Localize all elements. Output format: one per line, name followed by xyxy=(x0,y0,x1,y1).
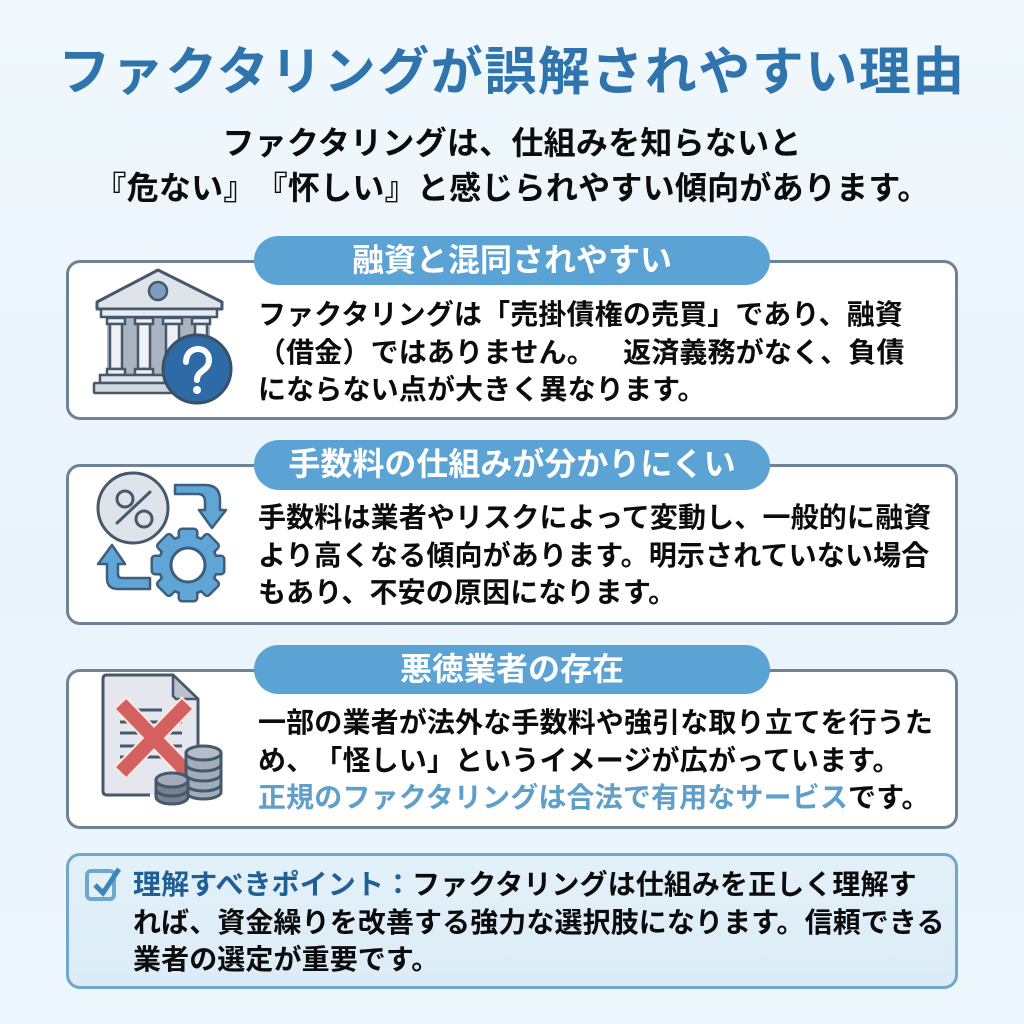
heading pill: 手数料の仕組みが分かりにくい xyxy=(288,446,736,482)
body text xyxy=(258,502,931,608)
body text: より高くなる傾向があります。明示されていない場合 xyxy=(258,540,929,570)
card frame xyxy=(66,260,958,420)
panel: fee structure xyxy=(66,440,958,625)
card frame xyxy=(66,669,958,829)
panel: loan confusion xyxy=(66,236,958,420)
body text: ファクタリングは「売掛債権の売買」であり、融資 xyxy=(258,299,903,330)
callout frame xyxy=(66,853,958,989)
body text: （借金）ではありません。 返済義務がなく、負債 xyxy=(258,336,905,368)
subtitle xyxy=(94,125,930,206)
body text xyxy=(258,299,905,405)
panel: bad actors xyxy=(66,645,958,829)
subtitle: ファクタリングは、仕組みを知らないと xyxy=(222,125,802,161)
callout text: れば、資金繰りを改善する強力な選択肢になります。信頼できる xyxy=(133,906,945,938)
title: ファクタリングが誤解されやすい理由 xyxy=(58,44,966,102)
body text: 一部の業者が法外な手数料や強引な取り立てを行うた xyxy=(258,707,933,738)
body text: め、「怪しい」というイメージが広がっています。 xyxy=(258,744,901,776)
callout: key point xyxy=(66,853,958,989)
icon: checkbox xyxy=(85,868,121,901)
body text: にならない点が大きく異なります。 xyxy=(258,374,706,405)
heading pill xyxy=(254,236,770,285)
body text: 手数料は業者やリスクによって変動し、一般的に融資 xyxy=(258,502,931,533)
body text xyxy=(258,707,933,813)
heading pill xyxy=(254,440,770,490)
body text: もあり、不安の原因になります。 xyxy=(258,577,676,608)
icon: percent and gear cycle xyxy=(96,472,228,602)
icon: bank with question mark xyxy=(92,268,232,404)
body text: 正規のファクタリングは合法で有用なサービスです。 xyxy=(258,782,930,813)
heading pill: 悪徳業者の存在 xyxy=(400,651,624,687)
subtitle: 『危ない』『怀しい』と感じられやすい傾向があります。 xyxy=(94,170,930,206)
heading pill xyxy=(254,645,770,694)
icon: crossed-out document with coins xyxy=(102,674,222,806)
callout text: 理解すべきポイント：ファクタリングは仕組みを正しく理解す xyxy=(133,869,917,900)
card frame xyxy=(66,464,958,625)
heading pill: 融資と混同されやすい xyxy=(352,242,672,278)
callout text: 業者の選定が重要です。 xyxy=(133,944,439,975)
callout text xyxy=(133,869,945,975)
